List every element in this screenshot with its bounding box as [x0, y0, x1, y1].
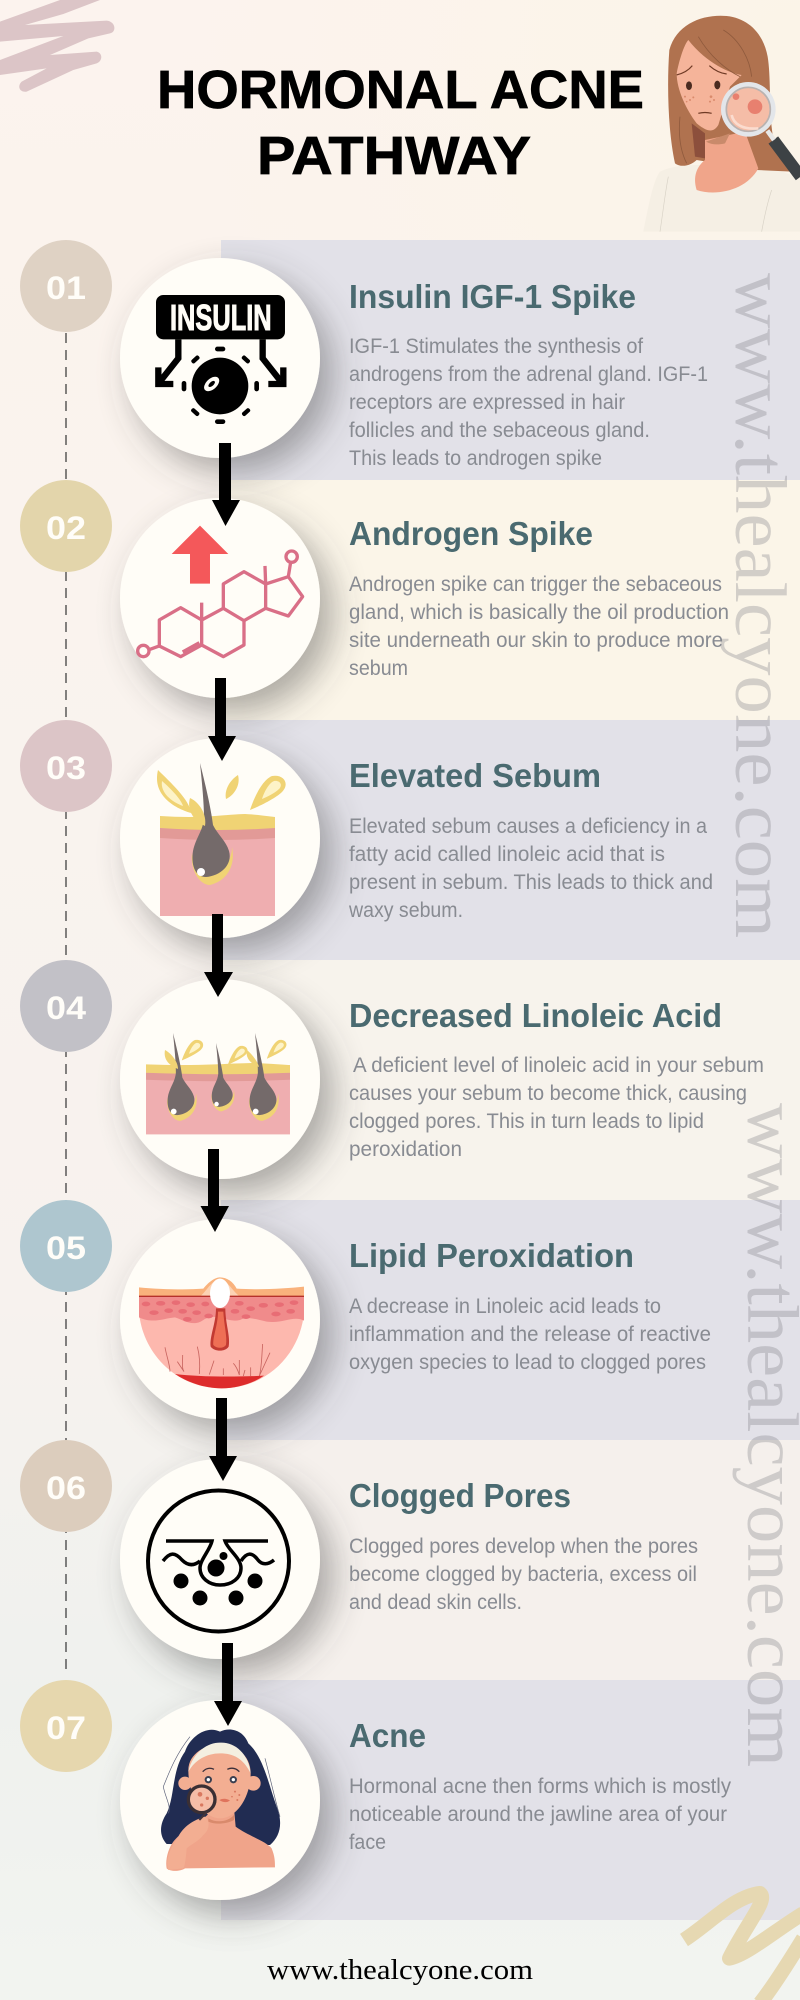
heading: step 04: Decreased Linoleic Acid — [349, 997, 722, 1034]
text block: step 07: noticeable around the jawline area of your — [349, 1803, 727, 1826]
icon: insulin acting on cell: INSULIN — [170, 297, 272, 338]
main title: PATHWAY — [257, 126, 531, 186]
icon disc: step 01 — [120, 258, 320, 458]
vertical watermark: upper: www.thealcyone.com — [720, 273, 800, 938]
text block: step 04 — [349, 1054, 764, 1161]
badge 02: 02 — [46, 510, 86, 546]
panel: step 06 background — [221, 1440, 800, 1680]
footer website: www.thealcyone.com — [267, 1954, 533, 1986]
badge 07 — [20, 1680, 112, 1772]
text block: step 03: present in sebum. This leads to thick and — [349, 871, 713, 894]
heading: step 03: Elevated Sebum — [349, 757, 601, 794]
background tint: upper right cream — [0, 0, 800, 700]
decorative scribble: bottom right — [684, 1893, 800, 2000]
panel: step 02 background — [221, 480, 800, 720]
badge 03: 03 — [46, 750, 86, 786]
text block: step 04: A deficient level of linoleic acid in your sebum — [353, 1054, 764, 1077]
text block: step 01: follicles and the sebaceous gland. — [349, 419, 650, 442]
badge 01: 01 — [46, 270, 86, 306]
text block: step 06 — [349, 1535, 698, 1614]
icon: girl inspecting acne with magnifier — [161, 1729, 280, 1871]
text block: step 06: and dead skin cells. — [349, 1591, 522, 1614]
heading: step 01: Insulin IGF-1 Spike — [349, 278, 636, 315]
text block: step 04: causes your sebum to become thick, causing — [349, 1082, 747, 1105]
panel: step 07 background — [221, 1680, 800, 1920]
text block: step 03: waxy sebum. — [348, 899, 463, 922]
illustration: woman with magnifier on acne — [643, 16, 800, 232]
text block: step 01: androgens from the adrenal gland. IGF-1 — [349, 363, 708, 386]
panel: step 01 background — [221, 240, 800, 480]
text block: step 01: This leads to androgen spike — [349, 447, 602, 470]
text block: step 01: receptors are expressed in hair — [349, 391, 625, 414]
text block: step 03: Elevated sebum causes a deficiency in a — [349, 815, 707, 838]
text block: step 02: Androgen spike can trigger the sebaceous — [349, 573, 722, 596]
text block: step 04: peroxidation — [349, 1138, 462, 1161]
badge 02 — [20, 480, 112, 572]
decorative scribble: top left — [0, 0, 114, 92]
badge 04: 04 — [46, 990, 86, 1026]
heading: step 06: Clogged Pores — [349, 1477, 571, 1514]
text block: step 07 — [349, 1775, 731, 1854]
icon disc: step 07 — [120, 1700, 320, 1900]
heading: step 07: Acne — [349, 1717, 426, 1754]
icon: insulin acting on cell — [156, 295, 285, 424]
icon disc: step 02 — [120, 498, 320, 698]
badge 03 — [20, 720, 112, 812]
panel: step 03 background — [221, 720, 800, 960]
text block: step 03 — [348, 815, 713, 922]
text block: step 07: Hormonal acne then forms which is mostly — [349, 1775, 731, 1798]
arrow: step 4 to 5 — [200, 1149, 229, 1232]
badge 06 — [20, 1440, 112, 1532]
icon disc: step 03 — [120, 738, 320, 938]
icon disc: step 06 — [120, 1459, 320, 1659]
timeline dashed connector — [65, 333, 67, 1673]
badge 05: 05 — [46, 1230, 86, 1266]
arrow: step 2 to 3 — [208, 678, 236, 761]
text block: step 04: clogged pores. This in turn leads to lipid — [349, 1110, 704, 1133]
badge 01 — [20, 240, 112, 332]
heading: step 05: Lipid Peroxidation — [349, 1237, 634, 1274]
text block: step 06: become clogged by bacteria, excess oil — [349, 1563, 697, 1586]
icon disc: step 05 — [120, 1219, 320, 1419]
badge 04 — [20, 960, 112, 1052]
arrow: step 1 to 2 — [212, 443, 240, 526]
panel: step 05 background — [221, 1200, 800, 1440]
text block: step 05: A decrease in Linoleic acid leads to — [349, 1295, 661, 1318]
main title: HORMONAL ACNE — [157, 60, 644, 120]
text block: step 02: gland, which is basically the oil production — [349, 601, 729, 624]
badge 05 — [20, 1200, 112, 1292]
heading: step 02: Androgen Spike — [349, 515, 593, 552]
icon: androgen molecule with up arrow — [138, 526, 303, 657]
arrow: step 3 to 4 — [204, 914, 233, 997]
text block: step 05: inflammation and the release of reactive — [349, 1323, 711, 1346]
text block: step 01: IGF-1 Stimulates the synthesis of — [349, 335, 643, 358]
text block: step 06: Clogged pores develop when the pores — [349, 1535, 698, 1558]
text block: step 05 — [349, 1295, 711, 1374]
main title — [157, 60, 644, 186]
arrow: step 6 to 7 — [214, 1643, 242, 1726]
text block: step 03: fatty acid called linoleic acid that is — [349, 843, 665, 866]
icon: lipid peroxidation skin cross-section — [139, 1277, 304, 1388]
text block: step 02 — [349, 573, 729, 680]
badge 07: 07 — [46, 1710, 86, 1746]
text block: step 07: face — [349, 1831, 386, 1854]
icon: clogged pore outline — [148, 1490, 289, 1632]
icon: skin with three follicles — [146, 1033, 290, 1134]
text block: step 02: site underneath our skin to produce more — [349, 629, 723, 652]
icon disc: step 04 — [120, 979, 320, 1179]
text block: step 01 — [349, 335, 708, 470]
text block: step 02: sebum — [349, 657, 408, 680]
arrow: step 5 to 6 — [209, 1398, 237, 1481]
panel: step 04 background — [221, 960, 800, 1200]
icon: sebum on hair follicle — [157, 763, 286, 916]
text block: step 05: oxygen species to lead to clogged pores — [349, 1351, 706, 1374]
badge 06: 06 — [46, 1470, 86, 1506]
